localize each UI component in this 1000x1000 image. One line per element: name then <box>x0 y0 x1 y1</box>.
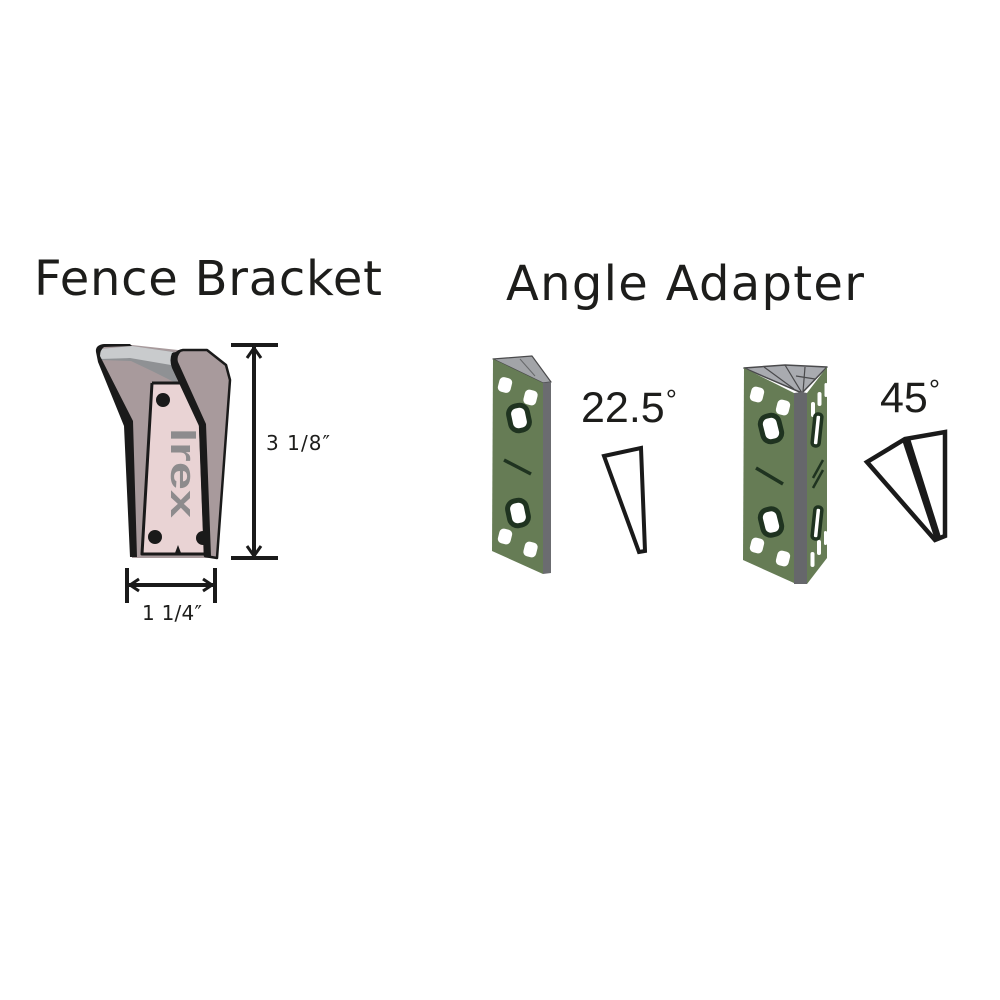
label: 45 degrees: 45 <box>880 374 928 422</box>
bracket mounting plate <box>142 383 207 554</box>
adapter top <box>744 365 827 393</box>
icon: 45 degree adapter <box>743 365 828 584</box>
adapter green face <box>492 359 543 574</box>
cut-outs <box>749 383 828 567</box>
cut-outs <box>497 376 539 558</box>
dimension: width 1 1/4: 1 1/4″ <box>142 601 202 625</box>
adapter top <box>493 356 551 383</box>
adapter centre spine <box>794 392 807 584</box>
adapter side edge <box>543 382 551 574</box>
left wing outline <box>96 344 137 557</box>
right wing outline <box>174 350 230 558</box>
heading: Angle Adapter: Angle Adapter <box>506 256 864 312</box>
dimension: height 3 1/8 <box>231 345 330 558</box>
screw holes <box>156 393 170 407</box>
adapter left face <box>743 368 794 583</box>
plate notch <box>175 545 181 553</box>
adapter right face <box>807 367 827 584</box>
icon: 22.5 degree adapter <box>492 356 551 574</box>
icon: 45 degree wedge <box>867 432 945 540</box>
dimension: height 3 1/8: 3 1/8″ <box>266 431 330 455</box>
label: 45 degrees: ° <box>929 374 940 405</box>
icon: 22.5 degree wedge <box>604 448 645 552</box>
logo: Irex <box>163 428 204 518</box>
label: 22.5 degrees: ° <box>666 384 677 415</box>
bracket body <box>98 345 230 558</box>
icon: fence bracket illustration <box>96 344 230 558</box>
dimension: width 1 1/4 <box>127 568 215 625</box>
heading: Fence Bracket: Fence Bracket <box>34 251 382 307</box>
label: 22.5 degrees: 22.5 <box>581 384 665 432</box>
bracket top face <box>100 346 178 383</box>
